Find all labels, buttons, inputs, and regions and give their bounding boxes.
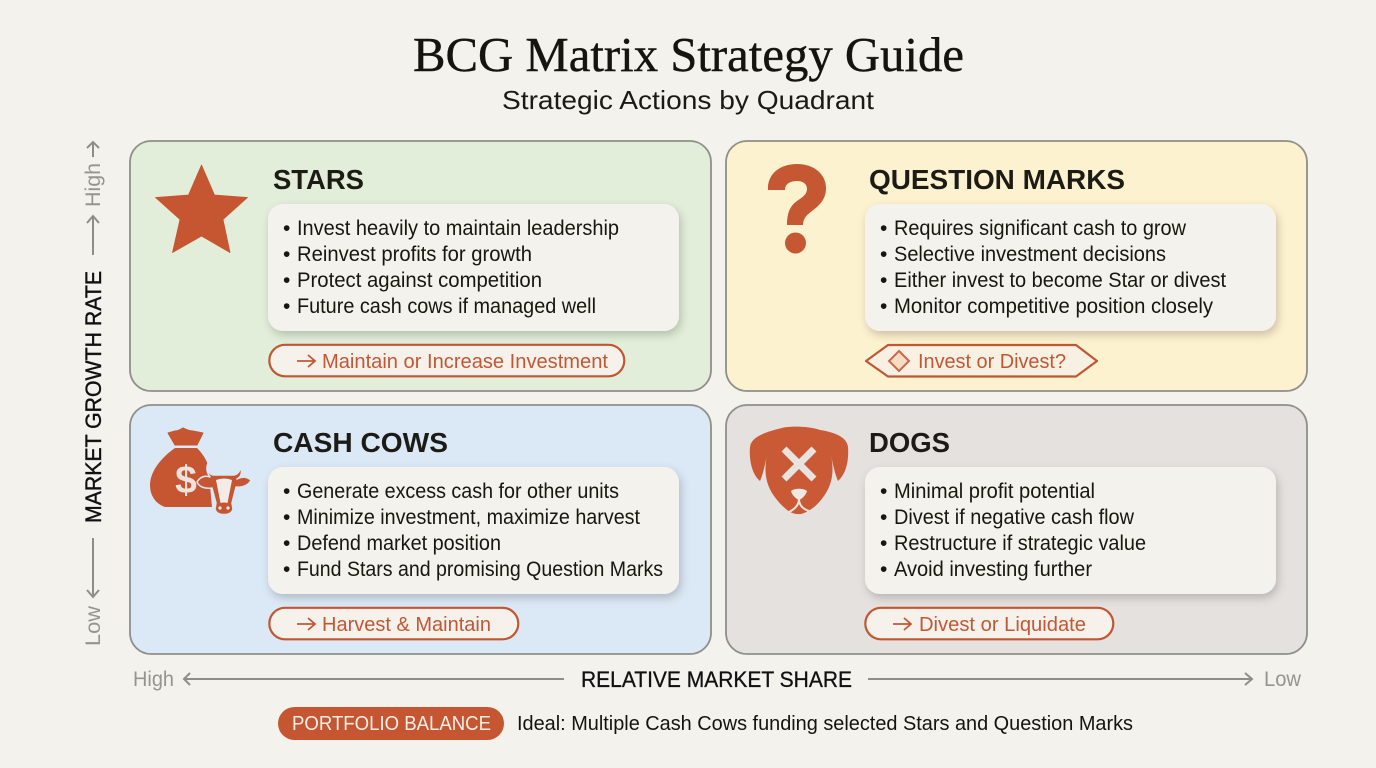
icon: dog face with cross: [750, 427, 848, 514]
card: stars actions: Protect against competition: [297, 269, 542, 292]
card: cash cows actions: •: [283, 506, 290, 529]
card: question marks actions: [865, 204, 1276, 331]
y axis: market growth rate: Low: [82, 605, 105, 646]
x axis: relative market share: RELATIVE MARKET SHARE: [581, 667, 852, 692]
card: cash cows actions: •: [283, 480, 290, 503]
card: cash cows actions: Fund Stars and promising Question Marks: [297, 558, 663, 581]
panel: stars: [130, 141, 711, 391]
card: cash cows actions: •: [283, 532, 290, 555]
action badge: question marks: [866, 345, 1097, 376]
y axis: market growth rate: High: [82, 163, 105, 207]
subtitle: Strategic Actions by Quadrant: [502, 85, 875, 115]
card: question marks actions: Requires significant cash to grow: [894, 217, 1187, 240]
icon: money bag and cow: $: [175, 459, 197, 502]
card: question marks actions: •: [880, 269, 887, 292]
card: stars actions: •: [283, 295, 290, 318]
y axis: market growth rate: MARKET GROWTH RATE: [81, 271, 106, 523]
card: cash cows actions: •: [283, 558, 290, 581]
icon: star: [156, 165, 248, 252]
card: stars actions: Invest heavily to maintain leadership: [297, 217, 619, 240]
title: BCG Matrix Strategy Guide: [413, 27, 964, 82]
card: stars actions: Reinvest profits for growth: [297, 243, 532, 266]
action pill: stars: [269, 345, 624, 376]
card: question marks actions: •: [880, 295, 887, 318]
card: question marks actions: Monitor competitive position closely: [894, 295, 1213, 318]
panel: dogs: [726, 405, 1307, 654]
card: cash cows actions: Defend market position: [297, 532, 501, 555]
card: question marks actions: •: [880, 243, 887, 266]
card: cash cows actions: Generate excess cash for other units: [297, 480, 619, 503]
card: dogs actions: •: [880, 558, 887, 581]
action pill: cash cows: Harvest & Maintain: [322, 613, 491, 636]
heading: question marks: QUESTION MARKS: [869, 164, 1125, 195]
card: dogs actions: [865, 467, 1276, 594]
card: question marks actions: Either invest to become Star or divest: [894, 269, 1226, 292]
card: cash cows actions: [268, 467, 679, 594]
icon: question mark: [768, 164, 826, 254]
card: stars actions: Future cash cows if managed well: [297, 295, 596, 318]
card: stars actions: •: [283, 217, 290, 240]
card: dogs actions: •: [880, 480, 887, 503]
y axis: market growth rate: [81, 142, 106, 646]
action pill: stars: Maintain or Increase Investment: [322, 350, 608, 373]
card: dogs actions: Avoid investing further: [894, 558, 1092, 581]
card: question marks actions: Selective investment decisions: [894, 243, 1166, 266]
portfolio balance note: Ideal: Multiple Cash Cows funding selected Stars and Question Marks: [517, 712, 1133, 735]
heading: dogs: DOGS: [869, 427, 950, 458]
action pill: cash cows: [269, 608, 518, 639]
card: question marks actions: •: [880, 217, 887, 240]
card: stars actions: •: [283, 269, 290, 292]
panel: cash cows: [130, 405, 711, 654]
x axis: relative market share: [133, 667, 1302, 692]
panel: question marks: [726, 141, 1307, 391]
card: dogs actions: •: [880, 532, 887, 555]
x axis: relative market share: Low: [1264, 668, 1302, 691]
x axis: relative market share: High: [133, 668, 174, 691]
action pill: dogs: [865, 608, 1113, 639]
card: dogs actions: Divest if negative cash flow: [894, 506, 1135, 529]
action badge: question marks: Invest or Divest?: [918, 350, 1066, 373]
action pill: dogs: Divest or Liquidate: [919, 613, 1086, 636]
card: stars actions: [268, 204, 679, 331]
card: stars actions: •: [283, 243, 290, 266]
card: cash cows actions: Minimize investment, maximize harvest: [297, 506, 640, 529]
card: dogs actions: •: [880, 506, 887, 529]
portfolio balance badge: [278, 707, 504, 740]
heading: stars: STARS: [273, 164, 364, 195]
heading: cash cows: CASH COWS: [273, 427, 448, 458]
icon: money bag and cow: [150, 428, 251, 514]
portfolio balance badge: PORTFOLIO BALANCE: [292, 712, 491, 735]
card: dogs actions: Restructure if strategic value: [894, 532, 1146, 555]
card: dogs actions: Minimal profit potential: [894, 480, 1095, 503]
